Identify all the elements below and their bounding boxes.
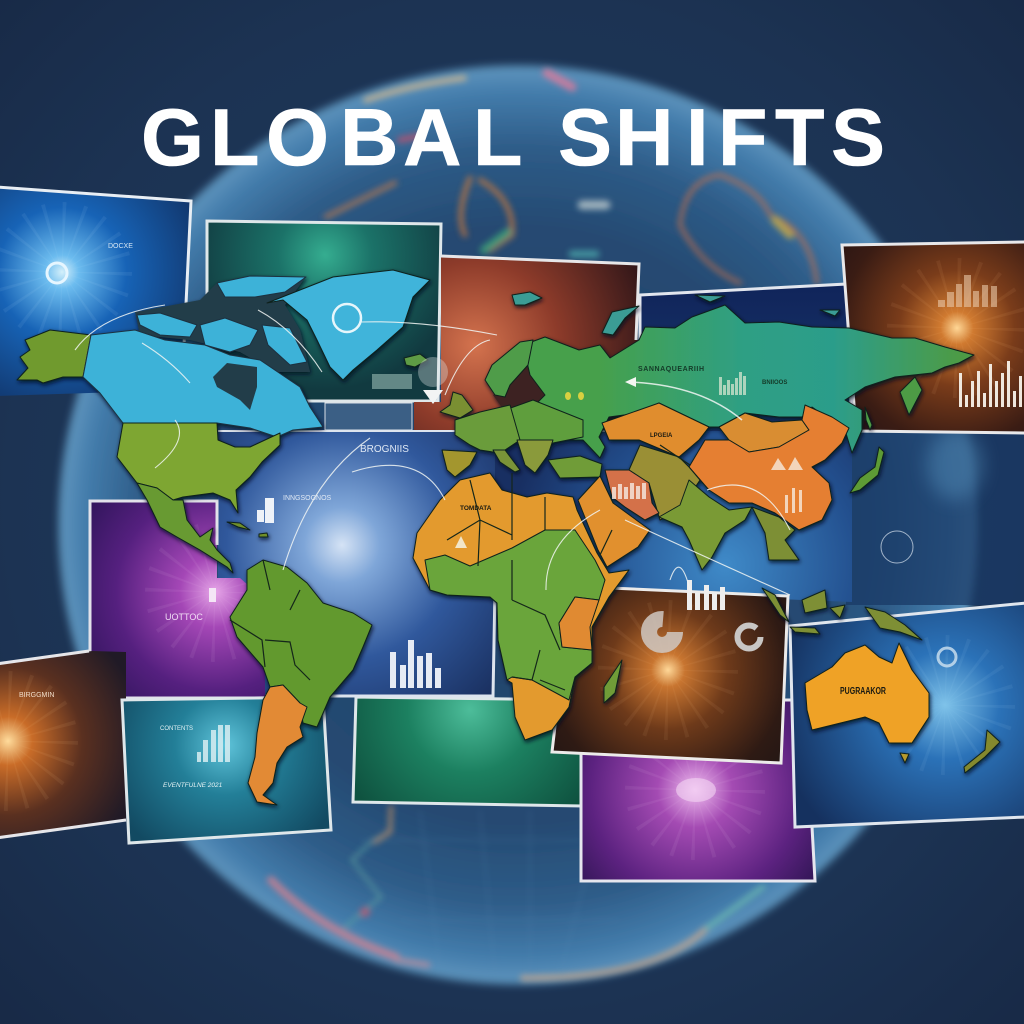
card: orange top right <box>842 242 1024 433</box>
faint bar chart <box>938 275 997 307</box>
Kamchatka <box>900 377 922 415</box>
Tasmania <box>900 753 909 763</box>
icon: Oceania ring <box>938 648 956 666</box>
Baltic <box>493 365 545 412</box>
map labels: SANNAQUEARIIH <box>638 366 704 373</box>
title: GLOBAL SHIFTS <box>141 93 885 183</box>
Mongolia <box>719 413 809 452</box>
Japan <box>850 447 884 493</box>
map labels: BNIIOOS <box>762 380 787 386</box>
bar chart <box>390 640 441 688</box>
Balkans <box>517 440 553 473</box>
Russia yellow markers <box>565 392 584 400</box>
Caribbean <box>227 522 268 537</box>
Alaska <box>17 330 91 383</box>
Africa <box>413 473 629 740</box>
card: blue Indian Ocean <box>495 431 852 602</box>
icon: Greenland ring <box>333 304 361 332</box>
globe coastlines <box>271 73 817 978</box>
India <box>659 480 752 570</box>
icon: glow shape <box>676 778 716 802</box>
Mexico and Central America <box>137 483 233 573</box>
South America <box>230 560 372 727</box>
Canada <box>83 276 323 437</box>
country borders <box>230 445 690 690</box>
Greenland <box>267 270 430 380</box>
Madagascar <box>604 660 622 703</box>
Arctic channels <box>135 277 310 372</box>
Sakhalin <box>865 407 872 430</box>
Western Europe <box>455 405 520 452</box>
card label: BIRGGMIN <box>19 692 54 699</box>
pie chart <box>649 619 675 645</box>
Russia mini chart <box>719 372 746 395</box>
card: blue behind Russia <box>640 284 852 440</box>
Central Africa <box>425 530 605 700</box>
data block <box>372 374 412 389</box>
map labels: LPGEIA <box>650 433 673 439</box>
map labels <box>460 366 887 697</box>
card label: CONTENTS <box>160 726 193 732</box>
China <box>689 405 849 530</box>
Central Asia <box>629 445 700 520</box>
USA <box>117 423 280 513</box>
card: brown with pie <box>552 580 788 763</box>
map labels: TOMDATA <box>460 505 492 512</box>
Kazakhstan <box>602 403 709 457</box>
Australia <box>805 643 929 743</box>
card label: UOTTOC <box>165 612 203 622</box>
Arabia <box>578 476 650 567</box>
globe grid <box>360 810 620 980</box>
card: blue top-left <box>0 187 191 396</box>
donut chart <box>738 626 760 648</box>
Hudson Bay <box>213 363 257 410</box>
card: big blue center <box>218 431 640 696</box>
card: faint dark right panel <box>846 430 1024 605</box>
card: blue Oceania <box>790 603 1024 827</box>
icon: ring <box>47 263 67 283</box>
Africa triangle icon <box>455 536 467 548</box>
marker <box>209 588 216 602</box>
map data charts <box>612 372 803 513</box>
card label: EVENTFULNE 2021 <box>163 782 223 789</box>
flow arrows <box>75 305 790 595</box>
arrow head <box>625 377 636 387</box>
Scandinavia <box>485 340 533 397</box>
UK <box>440 392 473 418</box>
world map <box>17 270 1000 805</box>
Arctic islands <box>512 292 840 335</box>
Indonesia <box>762 588 922 640</box>
Argentina <box>248 685 307 805</box>
Iceland <box>404 354 428 367</box>
card text: DOCXE <box>108 243 133 250</box>
card: orange left <box>0 651 126 838</box>
Eastern Europe <box>505 400 583 455</box>
white bars <box>257 498 274 523</box>
Southeast Asia <box>752 507 799 560</box>
Eurasia north <box>523 305 974 458</box>
map labels: PUGRAAKOR <box>840 686 887 697</box>
strip under teal card <box>325 403 412 430</box>
Turkey <box>548 456 602 478</box>
card label: INNGSOGNOS <box>283 495 332 502</box>
Iran <box>605 470 659 520</box>
Italy <box>493 450 520 472</box>
bar chart <box>197 725 230 762</box>
Spain <box>442 450 477 477</box>
Iran chart <box>612 483 646 499</box>
bar chart <box>687 580 725 610</box>
New Zealand <box>964 730 1000 773</box>
card: purple bottom <box>581 700 815 881</box>
card: teal top <box>207 221 441 401</box>
right panel chart bars <box>959 361 1022 407</box>
icon: network globe <box>881 531 913 563</box>
card: purple left <box>90 501 265 698</box>
card label: BROGNIIS <box>360 444 409 455</box>
East Africa <box>559 597 599 650</box>
China chart <box>771 457 803 513</box>
card: red-brown <box>414 256 639 432</box>
card: teal bottom-left <box>122 697 331 843</box>
arrow: white down marker <box>418 357 448 404</box>
card: green bottom <box>353 697 582 806</box>
